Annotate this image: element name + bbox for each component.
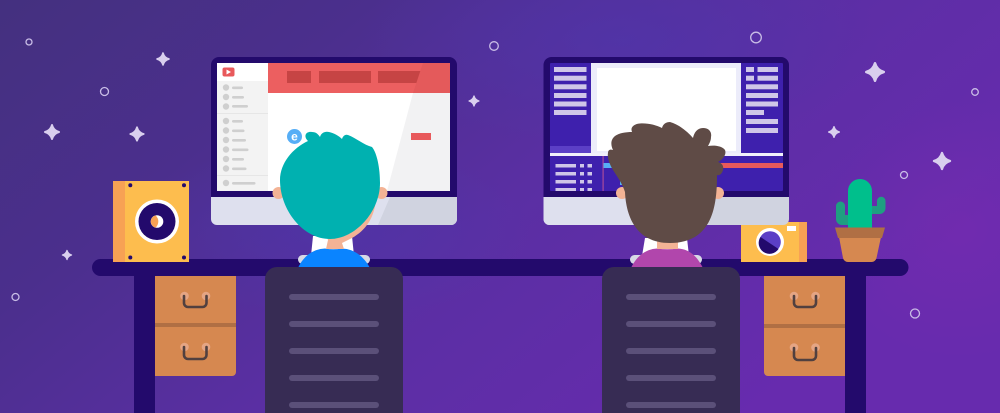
drawer handle (180, 292, 210, 307)
monitor bezel (544, 57, 789, 198)
right properties panel (746, 67, 778, 133)
timeline tracks (604, 163, 783, 185)
white collar (311, 236, 354, 256)
left tools panel (550, 67, 591, 153)
purple shirt (631, 248, 703, 268)
editor screen (550, 63, 783, 191)
right monitor (544, 57, 789, 225)
brown hair (608, 122, 725, 243)
browser icon: e (291, 130, 298, 144)
drawer handle (790, 343, 820, 360)
timeline separator (550, 153, 783, 156)
left drawers (155, 276, 236, 376)
desk (92, 259, 908, 413)
ears (272, 187, 284, 199)
monitor bezel (211, 57, 457, 198)
chin shadow (378, 197, 457, 225)
red header bar (268, 63, 450, 93)
shoulders (630, 255, 702, 264)
drawer handle (180, 343, 210, 359)
teal hair (280, 132, 380, 239)
white collar (642, 238, 689, 256)
right chair (602, 267, 740, 413)
left person (272, 132, 388, 268)
timeline controls (556, 164, 592, 191)
timeline playhead (602, 156, 604, 191)
left chair (265, 267, 403, 413)
blue shirt (298, 248, 370, 268)
monitor stand chin (211, 197, 457, 225)
screen glare shadow (387, 93, 450, 191)
cactus side arms (836, 202, 849, 225)
cactus body (848, 179, 872, 228)
screen (217, 63, 450, 191)
monitor stand chin (544, 197, 789, 225)
sidebar menu items (217, 84, 268, 186)
left monitor (211, 57, 457, 225)
cactus plant (835, 179, 886, 262)
shoulders (298, 255, 370, 264)
neck (657, 238, 678, 249)
red small button (411, 133, 431, 140)
header buttons (287, 71, 431, 83)
camera (741, 222, 807, 262)
sidebar (217, 63, 268, 191)
browser icon (287, 129, 302, 144)
speaker cone (135, 200, 179, 244)
neck and face (325, 200, 376, 249)
camera lens (756, 228, 784, 256)
drawer handle (790, 292, 820, 307)
youtube logo (222, 68, 234, 76)
speaker box (113, 181, 189, 262)
canvas panel (591, 63, 741, 153)
speaker screws (128, 183, 186, 260)
right person (608, 122, 725, 268)
decorative sparkles (45, 53, 950, 260)
white canvas (597, 68, 736, 151)
right drawers (764, 276, 845, 376)
decorative rings (12, 32, 978, 318)
ears (616, 187, 628, 199)
plant pot (839, 237, 881, 262)
